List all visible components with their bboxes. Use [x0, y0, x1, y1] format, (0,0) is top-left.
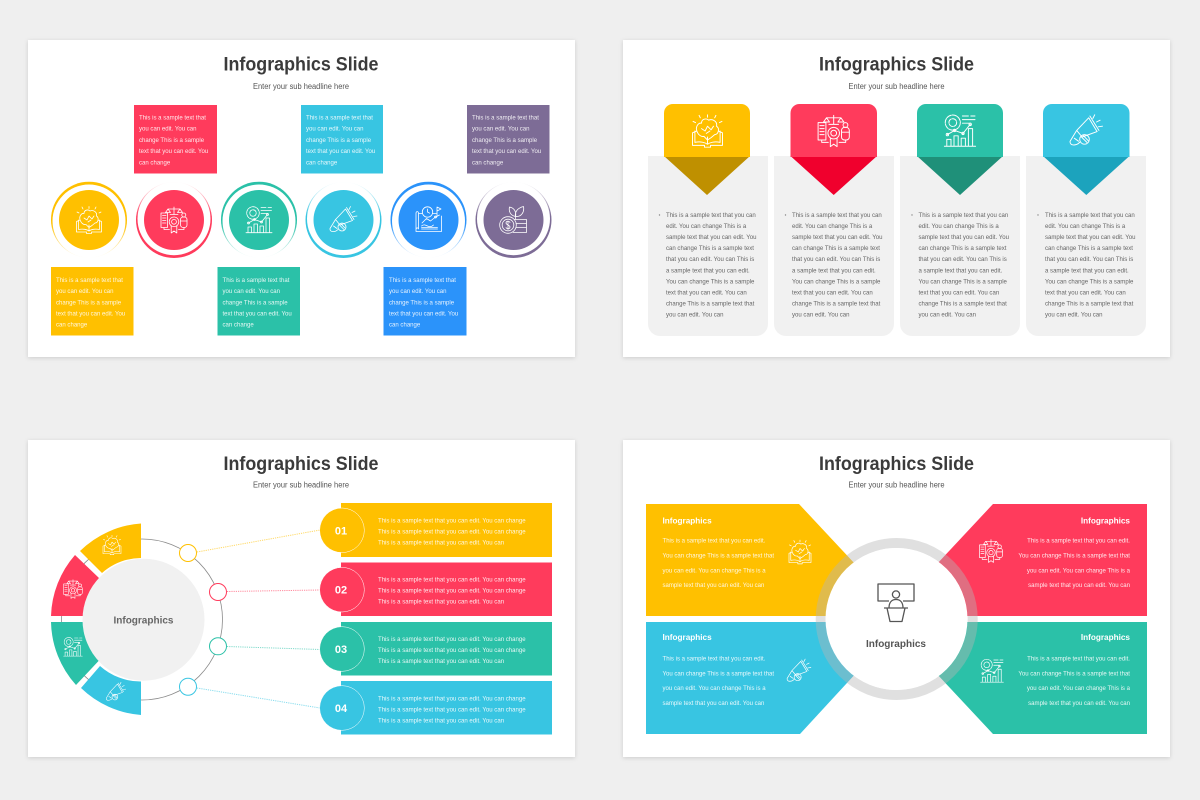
- column: cyan: change This is a sample text that: [1045, 302, 1134, 308]
- quadrant: teal: you can edit. You can change This is a: [1027, 686, 1131, 692]
- column: teal: sample text that you can edit. You: [918, 235, 1009, 241]
- text box: teal: can change: [222, 323, 254, 329]
- column: teal: edit. You can change This is a: [918, 224, 999, 230]
- column: teal: a sample text that you can edit.: [918, 268, 1003, 274]
- text box: red: you can edit. You can: [139, 127, 196, 133]
- text box: cyan: change This is a sample: [306, 138, 372, 144]
- column: red: a sample text that you can edit.: [792, 268, 876, 274]
- text box: teal: text that you can edit. You: [222, 312, 292, 318]
- circle icon: red: [136, 182, 212, 258]
- quadrant: red: sample text that you can edit. You can: [1028, 583, 1130, 589]
- quadrant: red: You can change This is a sample text that: [1018, 554, 1130, 560]
- text box: cyan: text that you can edit. You: [306, 149, 375, 155]
- text box: yellow: text that you can edit. You: [56, 312, 125, 318]
- quadrant: teal: You can change This is a sample text that: [1018, 672, 1130, 678]
- bar 04: This is a sample text that you can edit. You can: [378, 718, 504, 724]
- column: yellow: This is a sample text that you can: [666, 213, 756, 219]
- text box: cyan: can change: [306, 160, 338, 166]
- text box: yellow: change This is a sample: [56, 300, 122, 306]
- column: teal: change This is a sample text that: [918, 302, 1007, 308]
- column: red: sample text that you can edit. You: [792, 235, 882, 241]
- quadrant: cyan: This is a sample text that you can edit.: [662, 657, 766, 663]
- column: red: that you can edit. You can This is: [792, 257, 880, 263]
- quadrant: cyan: Infographics: [662, 633, 712, 642]
- column: cyan: you can edit. You can: [1045, 313, 1102, 319]
- column: cyan: a sample text that you can edit.: [1045, 268, 1129, 274]
- text box: teal: change This is a sample: [222, 300, 288, 306]
- quadrant: cyan: you can edit. You can change This is a: [662, 686, 766, 692]
- text box: yellow: [51, 267, 134, 336]
- text box: purple: text that you can edit. You: [472, 149, 541, 155]
- text box: purple: This is a sample text that: [472, 116, 539, 122]
- column: red: This is a sample text that you can: [792, 213, 882, 219]
- quadrant: red: This is a sample text that you can edit.: [1027, 539, 1130, 545]
- bar 01: [320, 503, 552, 557]
- column: yellow: change This is a sample text that: [666, 302, 755, 308]
- connector: teal: [210, 638, 320, 655]
- translucent ring: [821, 543, 973, 695]
- panel 1 subtitle: Enter your sub headline here: [253, 82, 350, 91]
- column: cyan: edit. You can change This is a: [1045, 224, 1126, 230]
- bar 03: This is a sample text that you can edit. You can change: [378, 637, 526, 643]
- column: teal: [900, 104, 1020, 336]
- column: teal: You can change This is a sample: [918, 279, 1008, 285]
- panel: circles with text boxes: [28, 40, 575, 357]
- text box: yellow: This is a sample text that: [56, 278, 123, 284]
- text box: purple: can change: [472, 160, 504, 166]
- center circle label: Infographics: [113, 616, 174, 626]
- segment: yellow: [80, 524, 141, 573]
- text box: cyan: [301, 105, 383, 174]
- bar 04: This is a sample text that you can edit. You can change: [378, 707, 526, 713]
- column: cyan: sample text that you can edit. You: [1045, 235, 1135, 241]
- segment: red: [51, 555, 99, 616]
- quadrant: cyan: You can change This is a sample text that: [662, 672, 774, 678]
- text box: blue: This is a sample text that: [389, 278, 456, 284]
- column: red: change This is a sample text that: [792, 302, 881, 308]
- text box: yellow: can change: [56, 323, 88, 329]
- orbit ring: [62, 539, 222, 700]
- quadrant: cyan: [646, 622, 870, 734]
- text box: red: can change: [139, 160, 171, 166]
- column: red: you can edit. You can: [792, 313, 850, 319]
- column: red: [774, 104, 894, 336]
- center label: Infographics: [866, 639, 926, 650]
- panel 3 card: [28, 440, 575, 757]
- column: yellow: can change This is a sample text: [666, 246, 754, 252]
- quadrant: yellow: You can change This is a sample text that: [662, 554, 774, 560]
- quadrant: teal: sample text that you can edit. You can: [1028, 701, 1130, 707]
- column: red: text that you can edit. You can: [792, 290, 873, 296]
- column: yellow: that you can edit. You can This is: [666, 257, 754, 263]
- panel 2 title: Infographics Slide: [819, 54, 974, 76]
- text box: purple: you can edit. You can: [472, 127, 530, 133]
- text box: blue: text that you can edit. You: [389, 312, 458, 318]
- panel 1 card: [28, 40, 575, 357]
- circle icon: teal: [221, 182, 297, 258]
- column: cyan: [1026, 104, 1146, 336]
- column: yellow: you can edit. You can: [666, 313, 724, 319]
- column: red: can change This is a sample text: [792, 246, 880, 252]
- bar 02: This is a sample text that you can edit. You can: [378, 600, 504, 606]
- quadrant: red: you can edit. You can change This is a: [1027, 568, 1131, 574]
- quadrant: yellow: This is a sample text that you can edit.: [662, 539, 766, 545]
- column: red: You can change This is a sample: [792, 279, 881, 285]
- quadrant: teal: Infographics: [1081, 633, 1130, 642]
- panel 4 title: Infographics Slide: [819, 453, 974, 475]
- quadrant: red: Infographics: [1081, 516, 1130, 526]
- text box: teal: [218, 267, 300, 336]
- column: cyan: text that you can edit. You can: [1045, 290, 1126, 296]
- text box: purple: [467, 105, 550, 174]
- text box: red: text that you can edit. You: [139, 149, 208, 155]
- connector: red: [210, 584, 320, 600]
- bar 01: This is a sample text that you can edit. You can change: [378, 518, 526, 524]
- quadrant: teal: [922, 622, 1147, 734]
- column: yellow: edit. You can change This is a: [666, 224, 747, 230]
- column: cyan: that you can edit. You can This is: [1045, 257, 1133, 263]
- quadrant: teal: This is a sample text that you can edit.: [1027, 657, 1130, 663]
- bar 03: 03: [335, 644, 347, 656]
- column: yellow: sample text that you can edit. You: [666, 235, 756, 241]
- circle icon: yellow: [51, 182, 127, 258]
- quadrant: cyan: sample text that you can edit. You can: [662, 701, 764, 707]
- icon: presenter at podium: [878, 584, 914, 622]
- quadrant: yellow: Infographics: [662, 516, 712, 526]
- column: teal: you can edit. You can: [918, 313, 976, 319]
- column: cyan: You can change This is a sample: [1045, 279, 1134, 285]
- circle icon: purple: [476, 182, 552, 258]
- bar 03: This is a sample text that you can edit. You can change: [378, 648, 526, 654]
- segment: cyan: [81, 666, 141, 715]
- column: cyan: can change This is a sample text: [1045, 246, 1133, 252]
- quadrant: yellow: [646, 504, 870, 616]
- panel: radial diagram with numbered bars: [28, 440, 575, 757]
- text box: red: change This is a sample: [139, 138, 205, 144]
- column: yellow: a sample text that you can edit.: [666, 268, 750, 274]
- bar 04: This is a sample text that you can edit. You can change: [378, 696, 526, 702]
- text box: blue: you can edit. You can: [389, 289, 446, 295]
- quadrant: yellow: you can edit. You can change This is a: [662, 568, 766, 574]
- column: yellow: You can change This is a sample: [666, 279, 755, 285]
- text box: teal: This is a sample text that: [222, 278, 290, 284]
- panel 3 title: Infographics Slide: [224, 453, 379, 475]
- text box: purple: change This is a sample: [472, 138, 538, 144]
- center circle: [826, 548, 968, 690]
- column: yellow: text that you can edit. You can: [666, 290, 747, 296]
- quadrant: red: [922, 504, 1147, 616]
- column: teal: can change This is a sample text: [918, 246, 1007, 252]
- bar 01: 01: [335, 525, 347, 537]
- bar 04: [320, 681, 552, 734]
- connector: cyan: [180, 678, 320, 708]
- segment: teal: [51, 622, 99, 685]
- column: cyan: This is a sample text that you can: [1045, 213, 1135, 219]
- bar 02: [320, 562, 552, 616]
- bar 03: This is a sample text that you can edit. You can: [378, 659, 504, 665]
- panel: four arrows around center circle: [623, 440, 1170, 757]
- column: red: edit. You can change This is a: [792, 224, 873, 230]
- text box: red: [134, 105, 217, 174]
- bar 02: This is a sample text that you can edit. You can change: [378, 589, 526, 595]
- circle icon: cyan: [306, 182, 382, 258]
- text box: blue: [384, 267, 466, 336]
- panel 4 card: [623, 440, 1170, 757]
- bar 02: 02: [335, 585, 347, 597]
- bar 01: This is a sample text that you can edit. You can: [378, 540, 504, 546]
- circle icon: blue: [390, 182, 466, 258]
- panel 2 card: [623, 40, 1170, 357]
- panel 3 subtitle: Enter your sub headline here: [253, 480, 350, 490]
- bar 03: [320, 622, 552, 676]
- center circle label: [82, 559, 204, 681]
- bar 04: 04: [335, 703, 348, 715]
- panel 4 subtitle: Enter your sub headline here: [848, 480, 945, 490]
- quadrant: yellow: sample text that you can edit. You can: [662, 583, 764, 589]
- text box: cyan: This is a sample text that: [306, 116, 373, 122]
- panel 1 title: Infographics Slide: [224, 54, 379, 76]
- text box: blue: can change: [389, 323, 421, 329]
- column: teal: that you can edit. You can This is: [918, 257, 1007, 263]
- text box: red: This is a sample text that: [139, 116, 206, 122]
- text box: teal: you can edit. You can: [222, 289, 280, 295]
- panel 2 subtitle: Enter your sub headline here: [848, 82, 945, 91]
- bar 02: This is a sample text that you can edit. You can change: [378, 578, 526, 584]
- panel: pointer cards: [623, 40, 1170, 357]
- text box: yellow: you can edit. You can: [56, 289, 114, 295]
- column: teal: This is a sample text that you can: [918, 213, 1008, 219]
- text box: blue: change This is a sample: [389, 300, 455, 306]
- bar 01: This is a sample text that you can edit. You can change: [378, 530, 526, 536]
- connector: yellow: [180, 530, 320, 562]
- column: yellow: [648, 104, 768, 336]
- column: teal: text that you can edit. You can: [918, 290, 999, 296]
- text box: cyan: you can edit. You can: [306, 127, 364, 133]
